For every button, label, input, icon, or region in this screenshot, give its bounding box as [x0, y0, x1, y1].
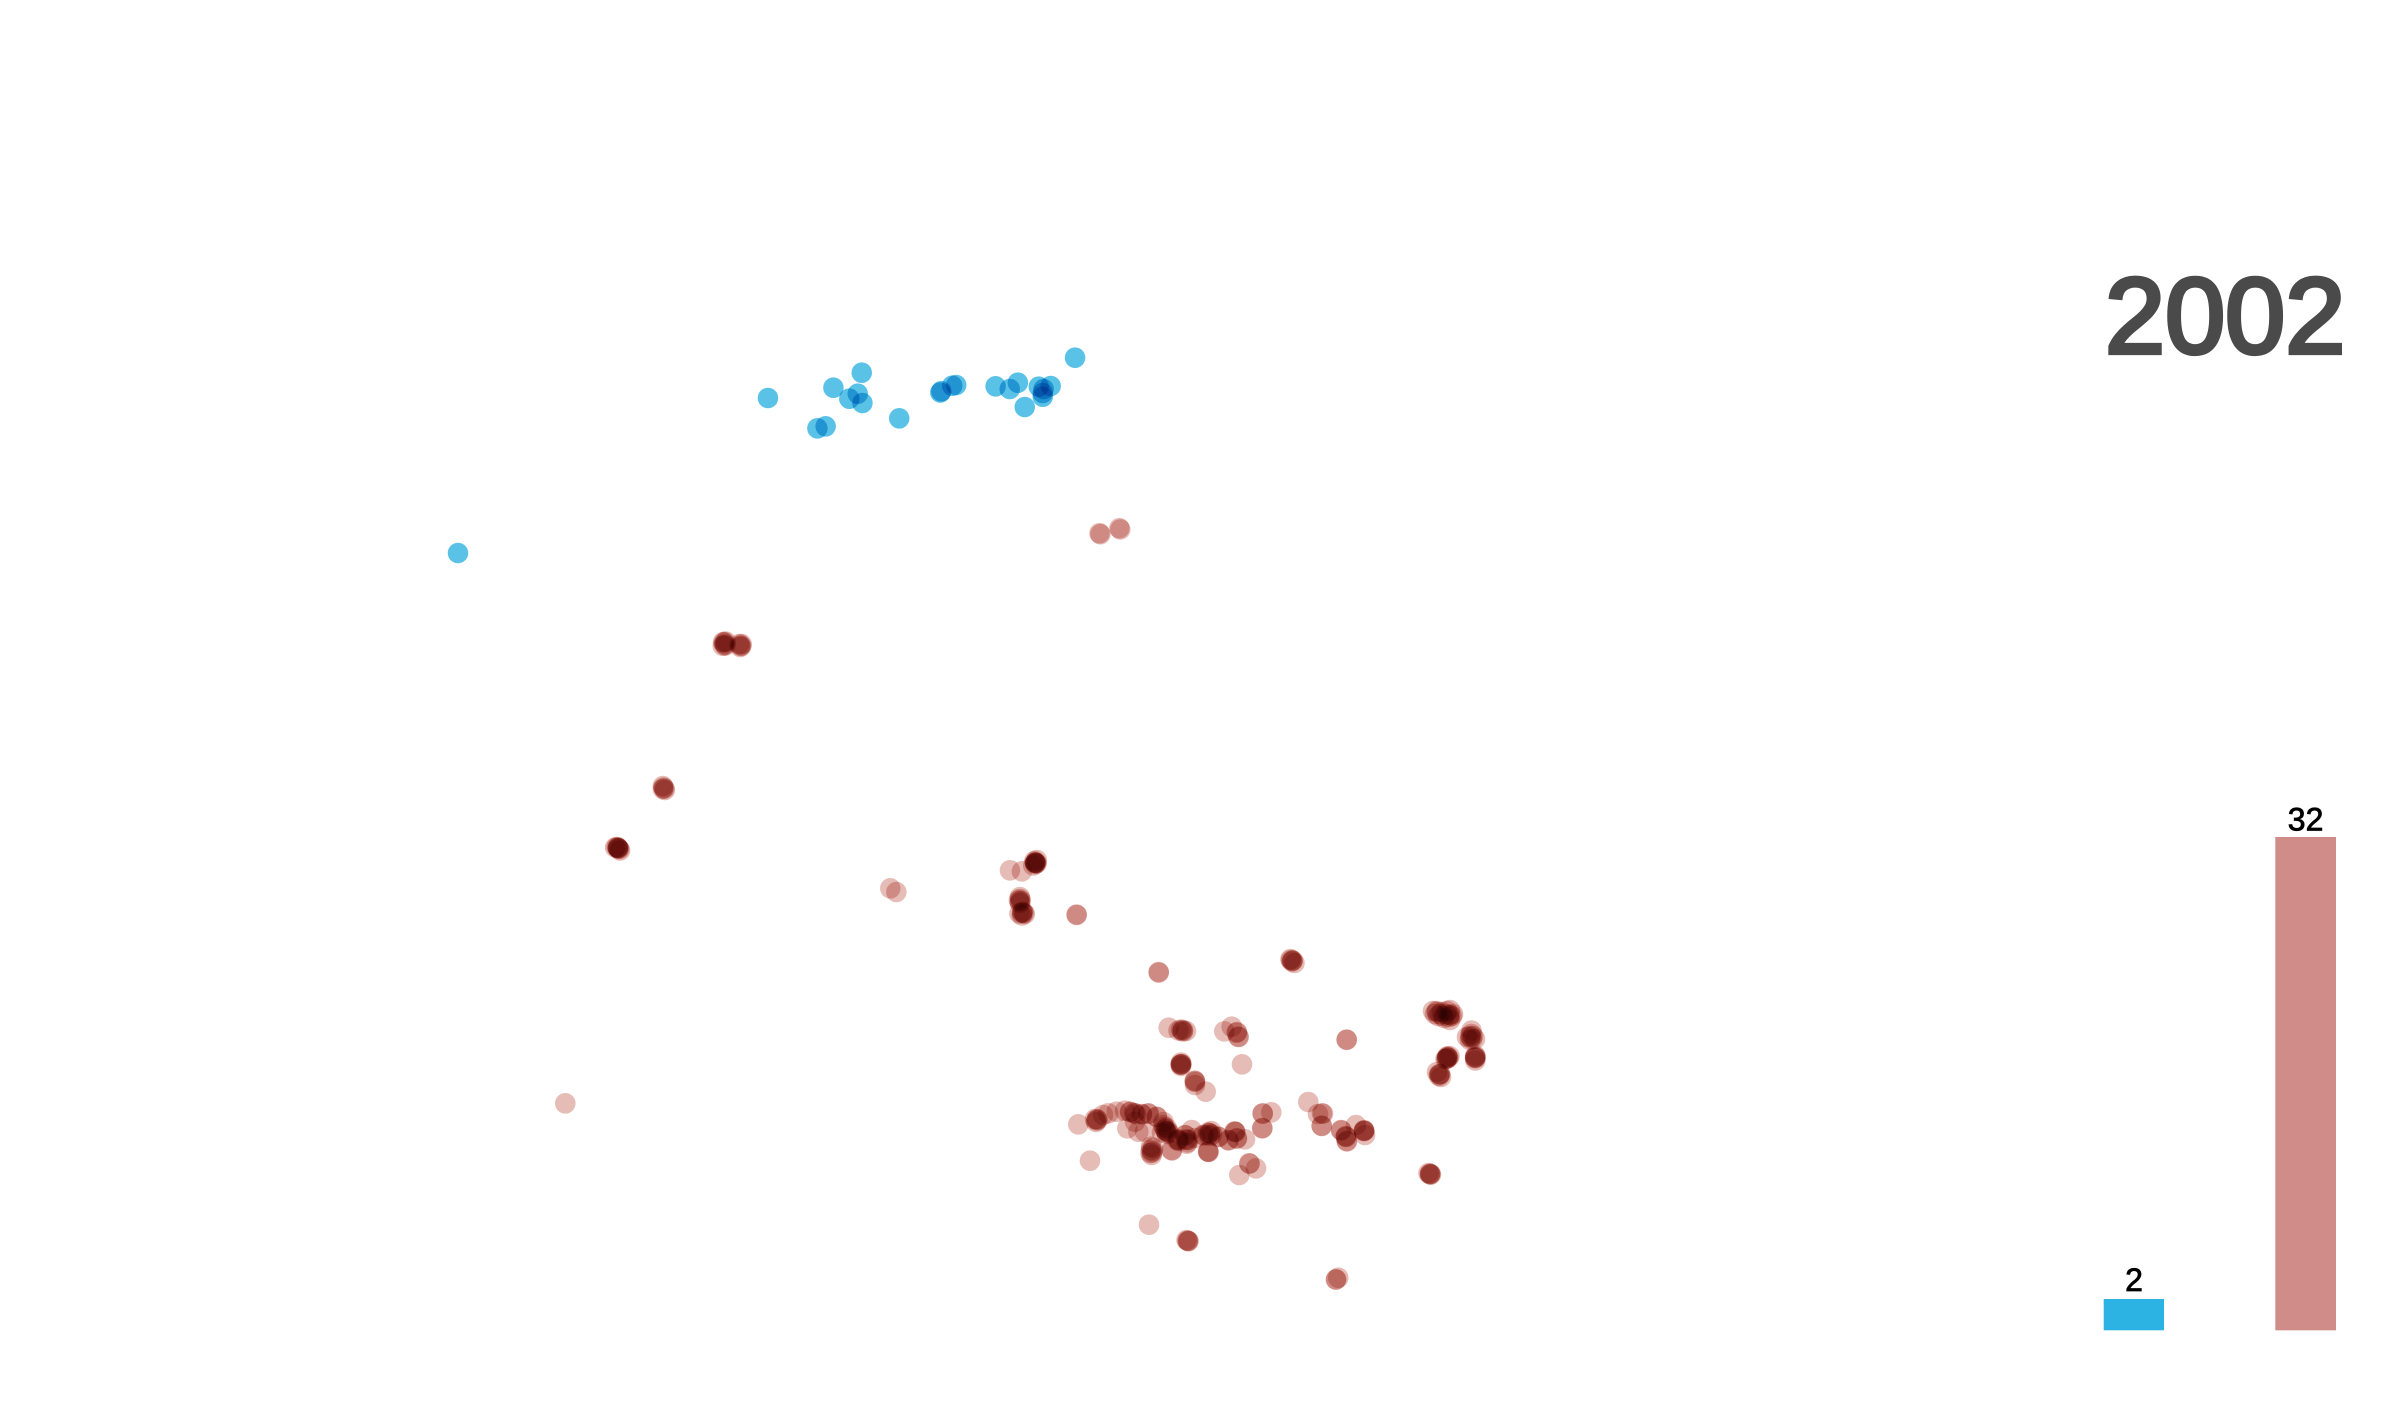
bar chart: two bars with values — [2104, 802, 2336, 1330]
blue bar value: 2 — [2125, 1262, 2143, 1298]
red bar — [2275, 837, 2336, 1330]
year label: 2002 — [2105, 255, 2345, 376]
scatter: blue dots — [448, 347, 1085, 563]
scatter: red dots, upper and western group — [605, 518, 1131, 926]
scatter: red dots, south-east group — [555, 949, 1486, 1290]
blue bar — [2104, 1299, 2164, 1330]
red bar value: 32 — [2288, 802, 2323, 838]
